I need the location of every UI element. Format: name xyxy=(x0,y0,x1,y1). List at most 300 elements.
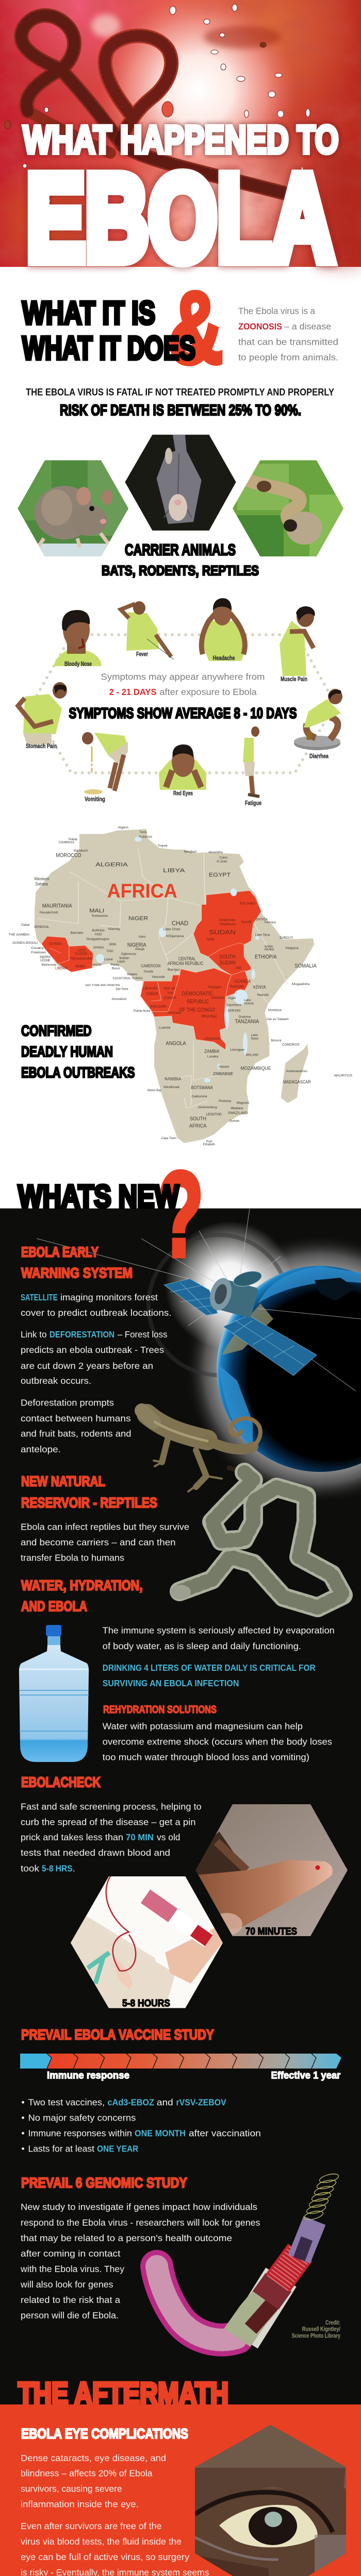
country labels: CHAD xyxy=(172,920,188,927)
early warning text: cover to predict outbreak locations. xyxy=(21,1308,172,1318)
vaccine bullet list xyxy=(22,2097,261,2154)
city labels: Harare xyxy=(219,1065,229,1069)
early warning text: are cut down 2 years before an xyxy=(21,1361,153,1371)
labels on outbreak countries: Lubumbashi xyxy=(204,1036,220,1041)
symptom: muscle pain: Muscle Pain xyxy=(281,675,307,683)
country labels: TANZANIA xyxy=(235,1019,259,1025)
labels on outbreak countries: COTE xyxy=(77,948,86,953)
heading: confirmed deadly human ebola outbreaks: DEADLY HUMAN xyxy=(21,1044,113,1060)
vaccine bullet list: cAd3-EBOZ xyxy=(107,2097,154,2107)
symptom: bloody nose xyxy=(54,610,102,668)
vaccine bullet list: Lasts for at least xyxy=(28,2143,94,2154)
labels on outbreak countries: REPUBLIC xyxy=(187,998,209,1005)
symptom: vomiting: Vomiting xyxy=(85,795,105,803)
hydration text: SURVIVING AN EBOLA INFECTION xyxy=(103,1678,239,1688)
labels on outbreak countries: Kisangani xyxy=(208,985,221,989)
labels on outbreak countries: Khartoum xyxy=(220,922,236,926)
heading: whats new: WHATS NEW xyxy=(18,1179,179,1214)
early warning text: contact between humans xyxy=(21,1413,131,1423)
symptoms onset text xyxy=(101,672,265,697)
labels on outbreak countries: SOUTH xyxy=(219,954,236,960)
hexagon photo: pin prick xyxy=(193,1803,351,1938)
city labels: Cairo xyxy=(219,855,228,859)
city labels: Hargeysa xyxy=(286,946,299,950)
vaccine bullet list: ONE MONTH xyxy=(135,2128,186,2138)
country labels: ANGOLA xyxy=(166,1040,186,1046)
country labels: NAMIBIA xyxy=(165,1077,182,1082)
country labels: ALGERIA xyxy=(95,861,128,868)
reptiles text xyxy=(21,1522,189,1563)
genomic study text: New study to investigate if genes impact how individuals xyxy=(21,2202,257,2212)
city labels: Cape Town xyxy=(161,1136,176,1140)
vaccine bullet list: and xyxy=(157,2097,173,2107)
labels on outbreak countries: CONGO xyxy=(163,995,176,1000)
city labels: Sao Tome xyxy=(116,987,128,991)
city labels: Novo xyxy=(112,966,120,970)
city labels: Dar es Salaam xyxy=(267,1017,289,1021)
country labels: Sahara xyxy=(35,882,48,887)
vaccine timeline chevrons xyxy=(20,2054,341,2069)
country labels: SWAZILAND xyxy=(228,1111,248,1115)
question mark: ? xyxy=(157,1146,204,1282)
city labels: Mbabane xyxy=(231,1106,243,1110)
city labels: BENIN xyxy=(109,942,117,946)
zoonosis definition: to people from animals. xyxy=(238,352,338,363)
city labels: Lusaka xyxy=(207,1054,219,1058)
label: 70 minutes: 70 MINUTES xyxy=(245,1926,297,1937)
symptom: diarrhea: Diarrhea xyxy=(309,752,329,759)
labels on outbreak countries: Libreville xyxy=(143,986,157,990)
country labels: SOUTH xyxy=(190,1115,206,1122)
hexagon photo: eye with cataract xyxy=(193,2421,348,2576)
country labels: MADAGASCAR xyxy=(283,1080,311,1085)
labels on outbreak countries: DEMOCRATIC xyxy=(182,990,213,997)
heading: symptoms show average: SYMPTOMS SHOW AVERAGE 8 - 10 DAYS xyxy=(69,705,297,722)
early warning text: Deforestation prompts xyxy=(21,1397,114,1408)
heading: rehydration solutions: REHYDRATION SOLUTIONS xyxy=(103,1704,217,1716)
early warning text: SATELLITE xyxy=(21,1292,58,1302)
heading: what it does: WHAT IT DOES xyxy=(22,330,195,367)
city labels: Monrovia xyxy=(41,963,56,967)
labels on outbreak countries: Kampala xyxy=(230,984,244,989)
heading: ebola early warning system xyxy=(21,1244,133,1281)
city labels: Addis xyxy=(264,944,273,948)
photo credit: Science Photo Library xyxy=(292,2333,340,2339)
country labels: Western xyxy=(34,876,50,882)
city labels: Tunis xyxy=(139,830,147,834)
heading: new natural reservoir: NEW NATURAL xyxy=(21,1473,105,1489)
panel: the aftermath xyxy=(0,2404,361,2576)
labels on outbreak countries: Abidjan xyxy=(75,963,86,968)
label: 5-8 hours: 5-8 HOURS xyxy=(122,1997,170,2009)
city labels: Lake xyxy=(251,1033,258,1037)
labels on outbreak countries: OF THE CONGO xyxy=(178,1006,215,1013)
city labels: Conakry xyxy=(31,946,44,950)
country labels: LIBYA xyxy=(163,867,185,874)
city labels: Tombouctou xyxy=(91,914,108,918)
country labels: KENYA xyxy=(253,985,266,990)
city labels: Gaborone xyxy=(191,1094,207,1098)
city labels: Mogadishu xyxy=(292,982,310,986)
ebolacheck text: vs old xyxy=(157,1832,180,1842)
heading: what it is: WHAT IT IS xyxy=(22,295,155,331)
early warning text: imaging monitors forest xyxy=(60,1292,158,1302)
lizard xyxy=(142,1411,260,1492)
hexagon photo: snake xyxy=(232,459,346,559)
genomic study text: respond to the Ebola virus - researchers will look for genes xyxy=(21,2217,260,2228)
city labels: Kigali xyxy=(228,996,236,1000)
symptom: stomach pain: Stomach Pain xyxy=(26,742,57,750)
heading: prevail ebola vaccine study: PREVAIL EBOLA VACCINE STUDY xyxy=(21,2026,214,2042)
labels on outbreak countries: Brazzaville xyxy=(150,1004,167,1008)
city labels: Walvis Bay xyxy=(147,1088,161,1092)
city labels: Accra xyxy=(92,962,101,967)
rehydration text: Water with potassium and magnesium can help xyxy=(103,1721,303,1731)
symptom: headache xyxy=(201,598,248,662)
city labels: Victoria xyxy=(244,1002,254,1005)
ebolacheck text: 5-8 HRS xyxy=(42,1863,73,1873)
country labels: ZAMBIA xyxy=(204,1049,220,1054)
heading: new natural reservoir xyxy=(21,1473,157,1511)
country labels: SOMALIA xyxy=(294,962,317,969)
early warning text: and fruit bats, rodents and xyxy=(21,1429,132,1439)
labels on outbreak countries: Nyala xyxy=(206,937,215,941)
rehydration text: too much water through blood loss and vomiting) xyxy=(103,1752,309,1762)
vaccine bullet list: ONE YEAR xyxy=(97,2143,139,2154)
symptom: bloody nose: Bloody Nose xyxy=(64,660,92,668)
ebolacheck text: . xyxy=(73,1863,75,1873)
heading: the aftermath: THE AFTERMATH xyxy=(18,2376,228,2412)
city labels: COMOROS xyxy=(282,1042,300,1046)
symptoms onset text: 2 - 21 DAYS xyxy=(109,687,157,697)
city labels: Lake Chad xyxy=(163,927,180,931)
reptiles text: Ebola can infect reptiles but they survive xyxy=(21,1522,189,1532)
genomic study text: person will die of Ebola. xyxy=(21,2310,119,2320)
city labels: MALAWI xyxy=(246,1053,258,1057)
vaccine bullet list: No major safety concerns xyxy=(28,2112,136,2123)
country labels: MOZAMBIQUE xyxy=(240,1066,271,1071)
zoonosis definition: ZOONOSIS xyxy=(238,321,282,332)
labels on outbreak countries: Kassala xyxy=(241,920,252,924)
satellite body xyxy=(206,1276,259,1319)
city labels: SAO TOME AND PRINCIPE xyxy=(85,984,120,987)
symptom: red eyes: Red Eyes xyxy=(173,789,193,796)
genomic study text: related to the risk that a xyxy=(21,2295,120,2305)
symptom: diarrhea xyxy=(294,689,342,759)
city labels: Bangui xyxy=(168,968,179,972)
eye complications text: inflammation inside the eye. xyxy=(21,2499,139,2510)
eye complications text xyxy=(21,2453,211,2576)
city labels: Banghazi xyxy=(184,850,197,854)
ebola virus ribbon xyxy=(21,15,287,194)
photo credit: Russell Kigntley/ xyxy=(302,2327,341,2333)
country labels: AFRICA xyxy=(189,1123,206,1129)
city labels: Ouagadougou xyxy=(86,937,109,941)
lakes xyxy=(96,837,259,1082)
heading: ebola early warning system: WARNING SYSTEM xyxy=(21,1265,133,1281)
city labels: Lake xyxy=(244,998,251,1002)
city labels: Marrakech xyxy=(74,849,88,853)
city labels: MAURITIUS xyxy=(334,1074,352,1077)
vaccine bullet list: rVSV-ZEBOV xyxy=(176,2097,226,2107)
city labels: Porto- xyxy=(110,963,120,967)
heading: new natural reservoir: RESERVOIR - REPTILES xyxy=(21,1495,157,1511)
country labels: LESOTHO xyxy=(206,1112,222,1116)
city labels: Niamey xyxy=(108,927,120,931)
city labels: Ogbomoso xyxy=(121,952,137,956)
early warning text: DEFORESTATION xyxy=(50,1329,114,1340)
city labels: Asmara xyxy=(264,920,276,924)
symptom: headache: Headache xyxy=(212,654,235,662)
heading: confirmed deadly human ebola outbreaks: EBOLA OUTBREAKS xyxy=(21,1065,135,1081)
hexagon photo: blood draw xyxy=(70,1875,224,2009)
labels on outbreak countries: REP. OF xyxy=(164,986,175,991)
eye complications text: eye can be full of active virus, so surgery xyxy=(21,2552,189,2562)
continent land xyxy=(35,829,314,1143)
city labels: TUNISIA xyxy=(139,835,153,839)
country labels: MOROCCO xyxy=(56,852,81,858)
city labels: SIERRA xyxy=(40,955,51,959)
rehydration text xyxy=(103,1721,332,1762)
hydration text: DRINKING 4 LITERS OF WATER DAILY IS CRITICAL FOR xyxy=(103,1663,316,1673)
hydration text xyxy=(103,1625,335,1688)
city labels: FASO xyxy=(95,932,102,936)
city labels: Durban xyxy=(229,1118,239,1123)
city labels: Lomé xyxy=(104,957,113,961)
city labels: Annobon xyxy=(112,997,127,1001)
outbreak countries xyxy=(41,891,261,1050)
labels on outbreak countries: SUDAN xyxy=(209,929,236,936)
early warning text: predicts an ebola outbreak - Trees xyxy=(21,1345,164,1355)
eye complications text: Even after survivors are free of the xyxy=(21,2521,161,2531)
labels on outbreak countries: THE xyxy=(167,991,174,995)
country labels: EGYPT xyxy=(209,871,231,878)
city labels: BURKINA xyxy=(92,928,105,933)
heading: confirmed deadly human ebola outbreaks xyxy=(21,1023,135,1081)
city labels: EQUATORIAL GUINEA xyxy=(113,977,143,980)
city labels: LEONE xyxy=(40,958,51,962)
country labels: ZIMBABWE xyxy=(213,1072,233,1076)
reptiles text: and become carriers – and can then xyxy=(21,1537,176,1548)
city labels: Nairobi xyxy=(257,993,269,997)
symptoms dotted hexagon xyxy=(32,635,335,773)
city labels: Abuja xyxy=(135,947,144,951)
labels on outbreak countries: Kinshasa xyxy=(168,1010,181,1015)
city labels: Casablanca xyxy=(58,840,74,844)
city labels: Bamako xyxy=(71,930,84,935)
ebolacheck text: 70 MIN xyxy=(126,1832,154,1842)
symptom: fatigue xyxy=(243,726,261,806)
country labels: BOTSWANA xyxy=(191,1086,213,1090)
city labels: Mombasa xyxy=(268,1008,282,1012)
heading: ebola eye complications: EBOLA EYE COMPLICATIONS xyxy=(21,2426,188,2442)
ampersand: & xyxy=(168,270,223,385)
city labels: Yaounde xyxy=(152,975,165,979)
heading: water hydration and ebola: AND EBOLA xyxy=(21,1598,87,1614)
heading: carrier animals: CARRIER ANIMALS xyxy=(125,540,236,558)
floating particles xyxy=(5,4,310,222)
city labels: Windhoek xyxy=(163,1085,179,1089)
labels on outbreak countries: RWANDA xyxy=(211,995,224,1000)
ebolacheck text: curb the spread of the disease – get a pin xyxy=(21,1817,196,1827)
genomic study text: with the Ebola virus. They xyxy=(20,2264,124,2274)
heading: bats, rodents, reptiles: BATS, RODENTS, REPTILES xyxy=(102,563,259,578)
symptom: stomach pain xyxy=(18,682,67,750)
reptiles text: transfer Ebola to humans xyxy=(21,1552,124,1563)
genomic study text: after coming in contact xyxy=(21,2248,121,2259)
labels on outbreak countries: Omdurman xyxy=(219,918,235,922)
city labels: Elizabeth xyxy=(203,1142,215,1146)
city labels: Pointe-Noire xyxy=(134,1009,150,1013)
ebolacheck text: took xyxy=(21,1863,39,1873)
ebolacheck text: Fast and safe screening process, helping to xyxy=(21,1801,202,1811)
labels on outbreak countries: SUDAN xyxy=(219,960,236,965)
city labels: Dodoma xyxy=(239,1014,251,1019)
symptoms onset text: after exposure to Ebola xyxy=(159,687,257,697)
timeline label: immune response: Immune response xyxy=(47,2070,129,2081)
zoonosis definition: – a disease xyxy=(284,321,331,332)
early warning text xyxy=(21,1292,172,1454)
city labels: Kano xyxy=(139,935,146,939)
country labels: MALI xyxy=(89,907,104,913)
hydration text: The immune system is seriously affected by evaporation xyxy=(103,1625,335,1636)
country labels xyxy=(34,852,317,1129)
symptom: fever xyxy=(121,601,174,659)
city labels: GUINEA-BISSAU xyxy=(12,941,38,945)
rehydration text: overcome extreme shock (occurs when the body loses xyxy=(103,1737,332,1747)
symptom: fatigue: Fatigue xyxy=(245,799,261,806)
symptom: muscle pain xyxy=(280,606,315,683)
heading: ebolacheck: EBOLACHECK xyxy=(21,1774,101,1790)
city labels: Tripoli xyxy=(158,843,168,848)
city labels: SENEGAL xyxy=(34,925,50,929)
early warning text: antelope. xyxy=(21,1444,61,1454)
satellite and earth illustration xyxy=(37,1209,361,1504)
eye complications text: blindness – affects 20% of Ebola xyxy=(21,2468,153,2478)
city labels: Rabat xyxy=(69,837,78,841)
country labels: NIGER xyxy=(128,916,148,922)
city labels: Freetown xyxy=(31,951,46,954)
city labels: Port xyxy=(206,1139,212,1143)
photo credit: Credit: xyxy=(325,2320,340,2326)
city labels: Alexandria xyxy=(208,850,223,854)
labels on outbreak countries: D'IVOIRE xyxy=(75,952,88,956)
heading: water hydration and ebola xyxy=(21,1578,143,1614)
city labels: N'Djamena xyxy=(166,934,184,938)
map of africa xyxy=(9,825,352,1146)
country labels: ETHIOPIA xyxy=(255,953,277,960)
early warning text: – Forest loss xyxy=(118,1329,168,1340)
water bottle xyxy=(19,1625,89,1762)
city labels: Dakar xyxy=(21,923,30,927)
city labels: Nyasa xyxy=(251,1037,258,1040)
zoonosis definition: The Ebola virus is a xyxy=(238,306,315,316)
city labels: Malabo xyxy=(127,972,138,976)
labels on outbreak countries: LIBERIA xyxy=(55,966,67,970)
hydration text: of body water, as is sleep and daily functioning. xyxy=(103,1641,301,1651)
city labels: Lilongwe xyxy=(230,1048,245,1052)
eye complications text: survivors, causing severe xyxy=(21,2484,122,2494)
zoonosis definition xyxy=(238,306,338,363)
labels on outbreak countries: GABON xyxy=(146,992,158,996)
city labels: Lake Tana xyxy=(255,933,270,937)
rattlesnake xyxy=(170,1468,343,1607)
labels on outbreak countries: UGANDA xyxy=(234,979,251,984)
genomic study text: will also look for genes xyxy=(20,2279,113,2290)
city labels: THE GAMBIA xyxy=(9,933,29,936)
labels on outbreak countries xyxy=(49,901,255,1041)
photo credit xyxy=(292,2320,341,2339)
ebolacheck text: tests that needed drawn blood and xyxy=(21,1848,170,1858)
early warning text: outbreak occurs. xyxy=(21,1376,91,1386)
map title: africa: AFRICA xyxy=(107,880,177,902)
city labels xyxy=(9,825,352,1146)
city labels: Algiers xyxy=(118,825,128,829)
city labels: BURUNDI xyxy=(228,1009,240,1012)
eye complications text: virus via blood tests, the fluid inside the xyxy=(21,2536,182,2547)
city labels: Moroni xyxy=(271,1039,282,1042)
country labels: CAMEROON xyxy=(141,963,160,969)
symptom: vomiting xyxy=(82,732,128,803)
country labels: MAURITANIA xyxy=(42,903,72,909)
early warning text: Link to xyxy=(21,1329,47,1340)
labels on outbreak countries: Port Sudan xyxy=(240,901,255,905)
heading: confirmed deadly human ebola outbreaks: CONFIRMED xyxy=(21,1023,92,1040)
symptom: red eyes xyxy=(159,744,206,796)
genomic study text xyxy=(20,2202,260,2320)
country labels: CENTRAL xyxy=(178,957,196,961)
hero banner xyxy=(0,0,361,267)
symptoms onset text: Symptoms may appear anywhere from xyxy=(101,672,265,682)
city labels: TOGO xyxy=(106,949,113,953)
city labels: Ibadan xyxy=(119,956,129,960)
heading: water hydration and ebola: WATER, HYDRATION, xyxy=(21,1578,143,1594)
vaccine bullet list: Immune responses within xyxy=(28,2128,132,2138)
zoonosis definition: that can be transmitted xyxy=(238,337,338,347)
city labels: GHANA xyxy=(93,945,104,950)
country labels: NIGERIA xyxy=(127,942,146,948)
city labels: DJIBOUTI xyxy=(280,936,293,940)
labels on outbreak countries: Yamoussoukro xyxy=(70,956,93,960)
dark panel: whats new xyxy=(0,1209,361,2405)
city labels: Johannesburg xyxy=(198,1105,217,1109)
city labels: Douala xyxy=(144,969,153,973)
city labels: Ababa xyxy=(264,947,274,951)
vaccine bullet list: Two test vaccines, xyxy=(28,2097,105,2107)
ebolacheck text: prick and takes less than xyxy=(21,1832,123,1842)
heading: ebola early warning system: EBOLA EARLY xyxy=(21,1244,99,1260)
city labels: Nouakchott xyxy=(40,910,58,914)
heading: prevail 6 genomic study: PREVAIL 6 GENOMIC STUDY xyxy=(21,2175,187,2191)
hexagon photo: bat xyxy=(124,433,237,533)
labels on outbreak countries: Mbuji-Mayi xyxy=(202,1014,217,1018)
city labels: Lagos xyxy=(118,959,125,963)
city labels: Al Jizah xyxy=(217,859,227,863)
symptom: fever: Fever xyxy=(136,651,148,658)
labels on outbreak countries: GUINEA xyxy=(49,941,62,946)
city labels: Antananarivo xyxy=(286,1069,307,1073)
genomic study text: that may be related to a person's health outcome xyxy=(21,2233,232,2243)
solar panels xyxy=(164,1279,317,1376)
ebola virus particle illustration xyxy=(157,2172,339,2340)
city labels: Maputo xyxy=(237,1101,250,1105)
country labels: AFRICAN REPUBLIC xyxy=(168,961,204,967)
timeline label: effective 1 year: Effective 1 year xyxy=(271,2070,341,2081)
eye complications text: Dense cataracts, eye disease, and xyxy=(21,2453,166,2463)
city labels: Luanda xyxy=(159,1026,171,1029)
hexagon photo: rodent xyxy=(15,459,132,559)
city labels: Bujumbura xyxy=(226,1003,241,1007)
